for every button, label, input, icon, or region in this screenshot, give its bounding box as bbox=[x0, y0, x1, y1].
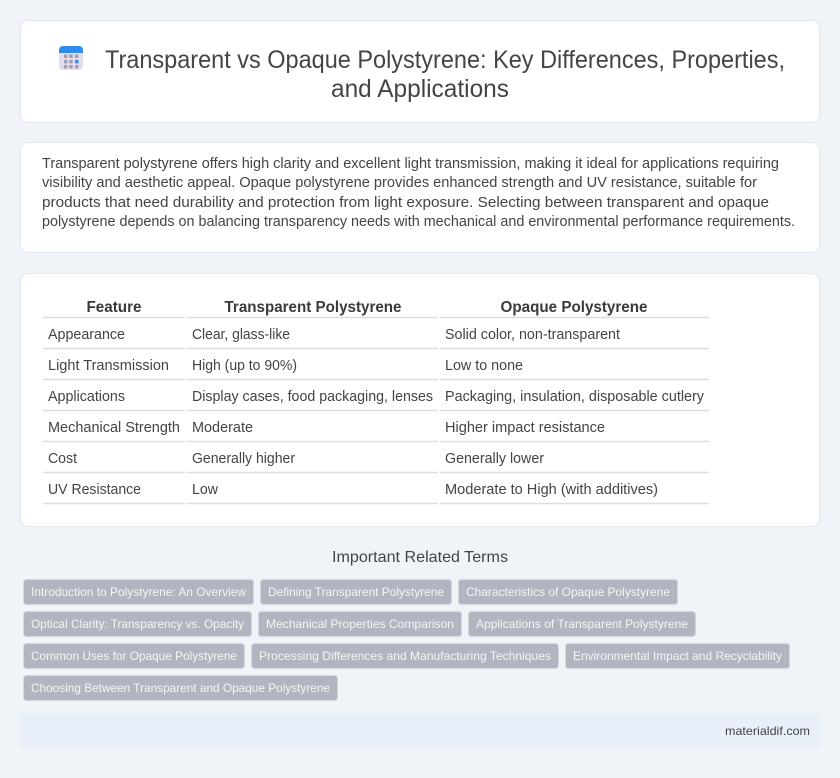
panel: header bbox=[20, 20, 820, 122]
row: cost: Generally higher bbox=[192, 451, 295, 467]
related term tags: Environmental Impact and Recyclability bbox=[573, 649, 782, 663]
row: appearance: Appearance bbox=[48, 327, 125, 343]
row: applications: Display cases, food packaging, lenses bbox=[192, 389, 433, 405]
row: applications: Packaging, insulation, disposable cutlery bbox=[445, 389, 705, 405]
related term tags: Choosing Between Transparent and Opaque Polystyrene bbox=[31, 681, 330, 695]
panel: introduction text: visibility and aesthetic appeal. Opaque polystyrene provides enhanced strength and UV resistance, suitable for bbox=[42, 175, 757, 191]
related term tags: Characteristics of Opaque Polystyrene bbox=[466, 585, 670, 599]
related term tags: Mechanical Properties Comparison bbox=[266, 617, 454, 631]
panel: introduction text: products that need durability and protection from light exposure. Selecting between transparent and opaque bbox=[42, 195, 769, 211]
table header bbox=[86, 299, 648, 316]
related term tags: Common Uses for Opaque Polystyrene bbox=[31, 649, 237, 663]
panel: comparison table bbox=[20, 274, 820, 526]
title: and Applications bbox=[331, 75, 509, 103]
title bbox=[105, 46, 785, 103]
panel: introduction text: polystyrene depends on balancing transparency needs with mechanical and environmental performance requirements. bbox=[42, 214, 795, 230]
heading: related terms: Important Related Terms bbox=[332, 549, 508, 566]
table header: Transparent Polystyrene bbox=[224, 299, 402, 316]
row: uv resistance: Moderate to High (with additives) bbox=[445, 482, 658, 498]
table header: Feature bbox=[86, 299, 142, 316]
row: uv resistance: Low bbox=[192, 482, 219, 498]
icon: calendar grid bbox=[59, 46, 83, 70]
row: light transmission: High (up to 90%) bbox=[192, 358, 297, 374]
related term tags bbox=[24, 580, 790, 700]
row: cost: Cost bbox=[48, 451, 77, 467]
row: mechanical strength bbox=[48, 420, 605, 436]
row: appearance: Clear, glass-like bbox=[192, 327, 290, 343]
related term tags: Introduction to Polystyrene: An Overview bbox=[31, 585, 246, 599]
row: uv resistance: UV Resistance bbox=[48, 482, 141, 498]
related term tags: Defining Transparent Polystyrene bbox=[268, 585, 444, 599]
table header: Opaque Polystyrene bbox=[500, 299, 648, 316]
title: Transparent vs Opaque Polystyrene: Key Differences, Properties, bbox=[105, 46, 785, 74]
row: light transmission: Low to none bbox=[445, 358, 523, 374]
row: light transmission bbox=[48, 358, 523, 374]
related term tags: Optical Clarity: Transparency vs. Opacity bbox=[31, 617, 244, 631]
row: mechanical strength: Mechanical Strength bbox=[48, 420, 180, 436]
panel: introduction text: Transparent polystyrene offers high clarity and excellent light transmission, making it ideal for applications requiring bbox=[42, 156, 779, 172]
row: mechanical strength: Higher impact resistance bbox=[445, 420, 605, 436]
panel: introduction text bbox=[20, 142, 820, 252]
row: cost bbox=[48, 451, 544, 467]
row: light transmission: Light Transmission bbox=[48, 358, 169, 374]
footer: materialdif.com bbox=[725, 724, 810, 738]
related term tags: Processing Differences and Manufacturing Techniques bbox=[259, 649, 551, 663]
row: appearance: Solid color, non-transparent bbox=[445, 327, 620, 343]
row: cost: Generally lower bbox=[445, 451, 544, 467]
related term tags: Applications of Transparent Polystyrene bbox=[476, 617, 688, 631]
footer bbox=[20, 714, 820, 748]
row: applications: Applications bbox=[48, 389, 125, 405]
row: mechanical strength: Moderate bbox=[192, 420, 253, 436]
row: applications bbox=[48, 389, 705, 405]
row: uv resistance bbox=[48, 482, 658, 498]
row: appearance bbox=[48, 327, 620, 343]
